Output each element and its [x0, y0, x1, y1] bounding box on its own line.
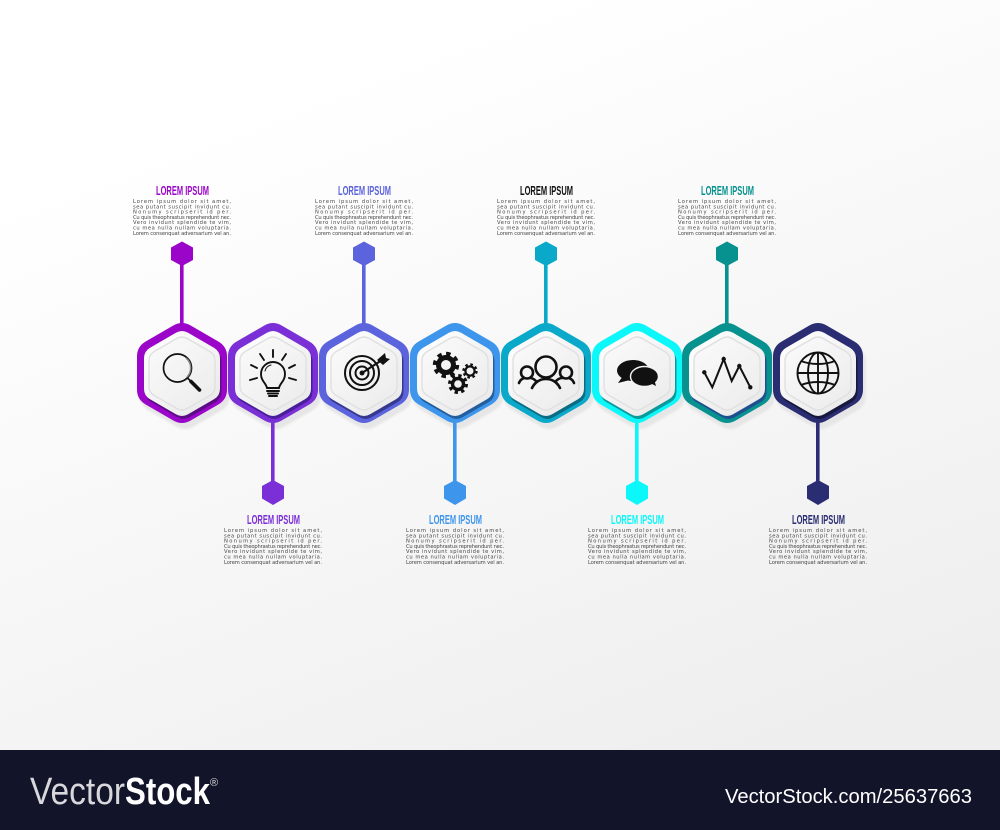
text block 8: Lorem consenquat adversarium vel an. — [769, 560, 867, 566]
text block 5 — [497, 199, 595, 237]
connector 2 — [271, 420, 275, 484]
icon: line chart — [702, 357, 752, 389]
title 1: LOREM IPSUM — [156, 183, 209, 198]
hexagon 8 — [773, 323, 863, 423]
text block 8: Lorem ipsum dolor sit amet, — [769, 528, 867, 534]
text block 2: Vero invidunt splendide te vim, — [224, 549, 322, 555]
text block 4: Lorem consenquat adversarium vel an. — [406, 560, 504, 566]
connector 4 — [453, 420, 457, 484]
text block 6: Vero invidunt splendide te vim, — [588, 549, 686, 555]
icon: magnifier — [164, 354, 200, 390]
text block 4: Lorem ipsum dolor sit amet, — [406, 528, 504, 534]
marker 4 — [444, 480, 466, 505]
text block 3: sea putant suscipit invidunt cu. — [315, 204, 413, 210]
icon: light bulb — [250, 350, 296, 396]
text block 4: Cu quis theophrastus reprehendunt nec. — [406, 544, 504, 550]
text block 3: cu mea nulla nullam voluptaria. — [315, 226, 413, 232]
text block 8: Nonumy scripserit id per. — [769, 539, 867, 545]
text block 1: Lorem consenquat adversarium vel an. — [133, 231, 231, 237]
title 4: LOREM IPSUM — [429, 512, 482, 527]
text block 1: sea putant suscipit invidunt cu. — [133, 204, 231, 210]
step 8: globe — [769, 323, 867, 566]
text block 7: Nonumy scripserit id per. — [678, 210, 776, 216]
text block 6: Lorem ipsum dolor sit amet, — [588, 528, 686, 534]
text block 6 — [588, 528, 686, 566]
text block 3: Cu quis theophrastus reprehendunt nec. — [315, 215, 413, 221]
text block 2 — [224, 528, 322, 566]
icon: speech bubbles — [617, 360, 658, 386]
title 3: LOREM IPSUM — [338, 183, 391, 198]
text block 3: Nonumy scripserit id per. — [315, 210, 413, 216]
icon: globe — [798, 352, 838, 394]
text block 5: Cu quis theophrastus reprehendunt nec. — [497, 215, 595, 221]
footer logo: Stock — [125, 771, 211, 813]
text block 5: Nonumy scripserit id per. — [497, 210, 595, 216]
text block 4: sea putant suscipit invidunt cu. — [406, 533, 504, 539]
hexagon soft shadows — [140, 329, 866, 429]
text block 5: Lorem consenquat adversarium vel an. — [497, 231, 595, 237]
text block 4: Vero invidunt splendide te vim, — [406, 549, 504, 555]
marker 6 — [626, 480, 648, 505]
icon: gears — [435, 354, 477, 392]
text block 5: cu mea nulla nullam voluptaria. — [497, 226, 595, 232]
text block 4: Nonumy scripserit id per. — [406, 539, 504, 545]
hexagon 1 — [137, 323, 227, 423]
text block 8: Vero invidunt splendide te vim, — [769, 549, 867, 555]
title 2: LOREM IPSUM — [247, 512, 300, 527]
text block 6: Nonumy scripserit id per. — [588, 539, 686, 545]
text block 8 — [769, 528, 867, 566]
text block 7: Cu quis theophrastus reprehendunt nec. — [678, 215, 776, 221]
text block 1: cu mea nulla nullam voluptaria. — [133, 226, 231, 232]
footer bar — [0, 750, 1000, 830]
text block 7: Lorem ipsum dolor sit amet, — [678, 199, 776, 205]
step 2: idea — [224, 323, 322, 566]
marker 5 — [535, 242, 557, 266]
marker 7 — [716, 242, 738, 266]
text block 7 — [678, 199, 776, 237]
icon: people — [519, 356, 574, 388]
text block 1: Cu quis theophrastus reprehendunt nec. — [133, 215, 231, 221]
text block 7: Lorem consenquat adversarium vel an. — [678, 231, 776, 237]
text block 7: sea putant suscipit invidunt cu. — [678, 204, 776, 210]
step 4: gears — [406, 323, 504, 566]
hexagon 5 — [501, 323, 591, 423]
text block 5: Lorem ipsum dolor sit amet, — [497, 199, 595, 205]
text block 2: sea putant suscipit invidunt cu. — [224, 533, 322, 539]
title 6: LOREM IPSUM — [611, 512, 664, 527]
hexagon 6 — [592, 323, 682, 423]
text block 2: Nonumy scripserit id per. — [224, 539, 322, 545]
connector 5 — [544, 262, 548, 326]
hexagon 7 — [682, 323, 772, 423]
title 5: LOREM IPSUM — [520, 183, 573, 198]
text block 4 — [406, 528, 504, 566]
connector 7 — [725, 262, 729, 326]
text block 1: Nonumy scripserit id per. — [133, 210, 231, 216]
text block 3: Vero invidunt splendide te vim, — [315, 220, 413, 226]
text block 3: Lorem ipsum dolor sit amet, — [315, 199, 413, 205]
text block 3: Lorem consenquat adversarium vel an. — [315, 231, 413, 237]
text block 5: Vero invidunt splendide te vim, — [497, 220, 595, 226]
footer logo — [30, 771, 218, 813]
text block 2: Lorem ipsum dolor sit amet, — [224, 528, 322, 534]
step 5: people — [497, 183, 595, 423]
step 3: target — [315, 183, 413, 423]
connector 3 — [362, 262, 366, 326]
text block 2: cu mea nulla nullam voluptaria. — [224, 554, 322, 560]
connector 1 — [180, 262, 184, 326]
text block 6: Cu quis theophrastus reprehendunt nec. — [588, 544, 686, 550]
hexagon 2 — [228, 323, 318, 423]
marker 8 — [807, 480, 829, 505]
marker 2 — [262, 480, 284, 505]
text block 2: Lorem consenquat adversarium vel an. — [224, 560, 322, 566]
step 1: search — [133, 183, 231, 423]
step 7: line chart — [678, 183, 776, 423]
text block 6: Lorem consenquat adversarium vel an. — [588, 560, 686, 566]
text block 7: cu mea nulla nullam voluptaria. — [678, 226, 776, 232]
text block 4: cu mea nulla nullam voluptaria. — [406, 554, 504, 560]
marker 3 — [353, 242, 375, 266]
marker 1 — [171, 242, 193, 266]
step 6: chat — [588, 323, 686, 566]
text block 8: cu mea nulla nullam voluptaria. — [769, 554, 867, 560]
text block 8: sea putant suscipit invidunt cu. — [769, 533, 867, 539]
connector 8 — [816, 420, 820, 484]
text block 6: cu mea nulla nullam voluptaria. — [588, 554, 686, 560]
text block 8: Cu quis theophrastus reprehendunt nec. — [769, 544, 867, 550]
hexagon 3 — [319, 323, 409, 423]
text block 7: Vero invidunt splendide te vim, — [678, 220, 776, 226]
footer logo: Vector — [30, 771, 125, 813]
footer image id: VectorStock.com/25637663 — [725, 786, 972, 808]
hexagon 4 — [410, 323, 500, 423]
text block 3 — [315, 199, 413, 237]
text block 1: Vero invidunt splendide te vim, — [133, 220, 231, 226]
text block 1 — [133, 199, 231, 237]
title 7: LOREM IPSUM — [701, 183, 754, 198]
connector 6 — [635, 420, 639, 484]
icon: target — [345, 353, 390, 390]
text block 2: Cu quis theophrastus reprehendunt nec. — [224, 544, 322, 550]
title 8: LOREM IPSUM — [792, 512, 845, 527]
text block 6: sea putant suscipit invidunt cu. — [588, 533, 686, 539]
text block 5: sea putant suscipit invidunt cu. — [497, 204, 595, 210]
footer logo: ® — [210, 777, 218, 789]
text block 1: Lorem ipsum dolor sit amet, — [133, 199, 231, 205]
